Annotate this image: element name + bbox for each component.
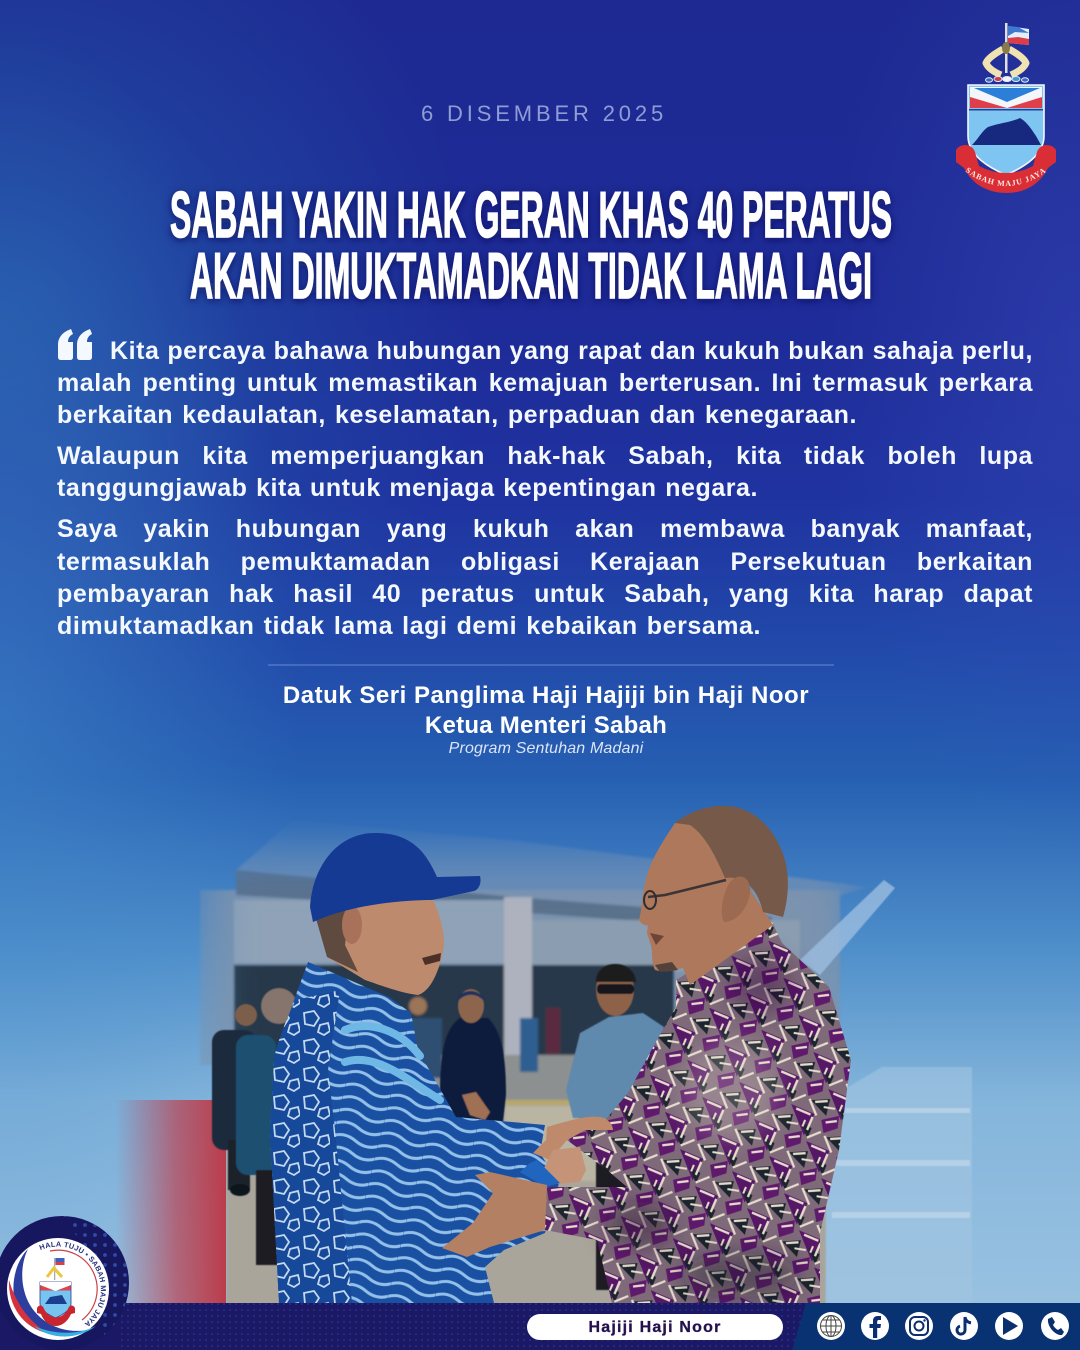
title [170, 178, 892, 312]
person: bodyguard with sunglasses [566, 964, 664, 1290]
left man shirt lower panel [270, 990, 352, 1303]
shield [968, 85, 1044, 175]
body text paragraph 3: termasuklah pemuktamadan obligasi Kerajaan Persekutuan berkaitan [57, 548, 1033, 576]
body text paragraph 2 [57, 442, 1033, 502]
left bystanders [212, 988, 297, 1265]
right man shirt tonal shading [606, 955, 800, 1297]
photo background: airport building and ground [200, 832, 863, 1303]
left man cap [310, 833, 481, 922]
left man shirt [270, 962, 559, 1303]
ribbon scroll [956, 145, 1056, 193]
right man hair [675, 806, 788, 917]
person: woman in navy [440, 989, 506, 1122]
footer dotted texture [120, 1303, 810, 1350]
attribution: Program Sentuhan Madani [449, 740, 643, 757]
body text paragraph 2: Walaupun kita memperjuangkan hak-hak Sabah, kita tidak boleh lupa [57, 442, 1033, 470]
badge mini crest [37, 1258, 75, 1326]
icon: youtube play [995, 1312, 1023, 1340]
flag pole [1005, 23, 1008, 73]
body text paragraph 1: malah penting untuk memastikan kemajuan berterusan. Ini termasuk perkara [57, 369, 1033, 397]
attribution [283, 682, 809, 757]
date: 6 DISEMBER 2025 [421, 101, 667, 126]
Mount Kinabalu [972, 118, 1041, 145]
badge dotted edge [62, 1216, 129, 1335]
shield white band [970, 87, 1042, 108]
left man's blue cuff [520, 1160, 560, 1187]
icon: quotation mark [58, 329, 92, 360]
lighter pavement [505, 1106, 605, 1181]
right man shirt [545, 922, 851, 1303]
left man's big hand [442, 1172, 547, 1257]
divider [268, 664, 834, 666]
icon: tiktok [950, 1312, 978, 1340]
person: right man, Anwar [545, 806, 851, 1303]
left man hair [315, 905, 358, 972]
hands [1002, 42, 1010, 54]
red backdrop strip [115, 1100, 226, 1305]
badge ring text: HALA TUJU • SABAH MAJU JAYA [39, 1242, 106, 1326]
shield navy line [969, 109, 1043, 110]
boarding stairs [800, 880, 972, 1303]
icon: phone [1041, 1312, 1069, 1340]
right man face and neck [639, 823, 773, 985]
shield red band [970, 97, 1042, 108]
right man's hand [543, 1147, 586, 1184]
left man neck and face [317, 897, 444, 995]
badge: Hala Tuju [0, 1216, 129, 1340]
background staff [408, 997, 560, 1078]
badge red swoosh [9, 1280, 50, 1334]
right man goatee [655, 962, 678, 972]
left man's fingers [533, 1117, 613, 1160]
glass doors [234, 965, 674, 1055]
louvres right [530, 920, 800, 972]
body text paragraph 1 [57, 337, 1033, 429]
building roof [236, 820, 868, 917]
body text paragraph 1: Kita percaya bahawa hubungan yang rapat dan kukuh bukan sahaja perlu, [110, 337, 1033, 365]
left man ear [342, 906, 362, 944]
badge dark disc [0, 1216, 129, 1350]
crest: Sabah coat of arms [956, 23, 1056, 193]
ground [226, 1102, 827, 1303]
body text paragraph 2: tanggungjawab kita untuk menjaga kepentingan negara. [57, 474, 758, 502]
icon: facebook [861, 1312, 889, 1340]
ribbon motto: SABAH MAJU JAYA [966, 168, 1046, 186]
roof underside [235, 870, 772, 921]
footer bar right [792, 1303, 1080, 1350]
body text paragraph 3 [57, 515, 1033, 640]
right man ear [722, 876, 750, 922]
flag [1008, 26, 1029, 45]
cream arms [986, 49, 1026, 75]
left man moustache [422, 953, 441, 965]
body text paragraph 3: dimuktamadkan tidak lama lagi demi kebaikan bersama. [57, 612, 761, 640]
pill text: Hajiji Haji Noor [588, 1319, 722, 1336]
badge white circle [7, 1238, 109, 1340]
building wall [200, 890, 840, 1065]
clasped hands [442, 1117, 613, 1257]
person: left man, Hajiji [270, 833, 559, 1303]
right man glasses [648, 880, 726, 897]
body text paragraph 3: Saya yakin hubungan yang kukuh akan membawa banyak manfaat, [57, 515, 1033, 543]
paved road [434, 1054, 574, 1100]
footer bar left [0, 1303, 810, 1350]
badge blue swoosh [13, 1249, 88, 1335]
attribution: Ketua Menteri Sabah [425, 712, 667, 739]
shield blue wedge [974, 88, 1040, 102]
left man shirt thick chest stripes [345, 1026, 440, 1100]
body text paragraph 3: pembayaran hak hasil 40 peratus untuk Sabah, yang kita harap dapat [57, 580, 1033, 608]
name pill [527, 1314, 783, 1340]
body text paragraph 1: berkaitan kedaulatan, keselamatan, perpaduan dan kenegaraan. [57, 401, 857, 429]
icon: instagram [905, 1312, 933, 1340]
badge light blue swoosh [34, 1326, 96, 1336]
attribution: Datuk Seri Panglima Haji Hajiji bin Haji Noor [283, 682, 809, 709]
louvres left [234, 900, 504, 963]
badge red arc [50, 1250, 97, 1320]
icon: website globe [817, 1312, 845, 1340]
crown beads [986, 76, 1028, 82]
column [504, 897, 532, 1062]
pavement line [505, 1099, 570, 1106]
right man mouth [650, 933, 664, 945]
